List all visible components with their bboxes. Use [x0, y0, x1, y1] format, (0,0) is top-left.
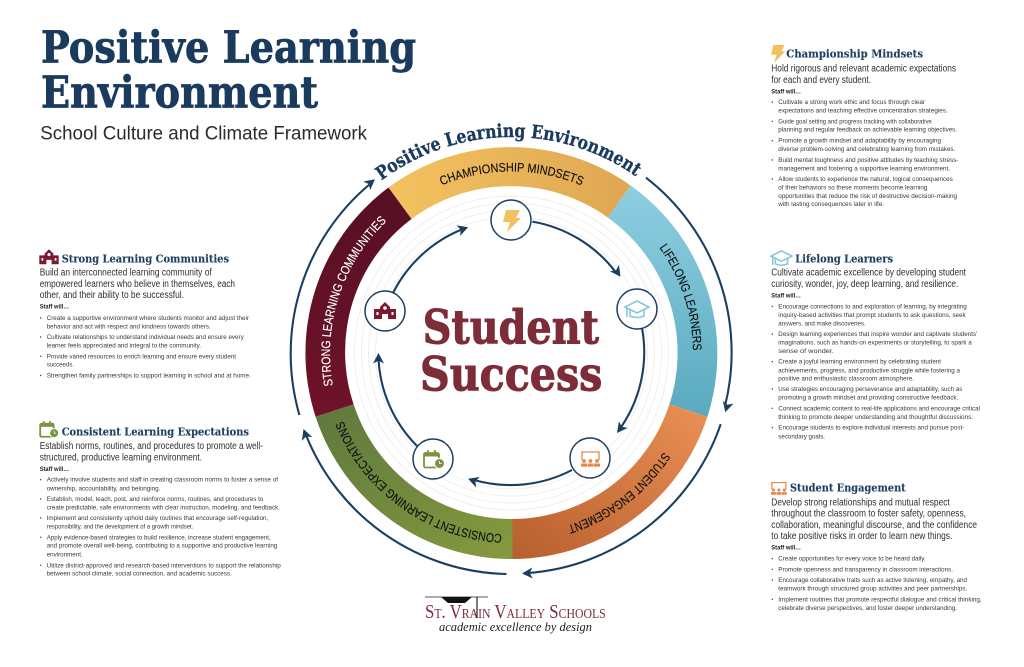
bullet list: Connect academic content to real-life applications and encourage critical — [778, 405, 981, 412]
bullet list: Encourage collaborative traits such as active listening, empathy, and — [778, 577, 967, 584]
bullet list: Apply evidence-based strategies to build resilience, increase student engagement, — [47, 534, 271, 541]
intro text — [771, 497, 977, 542]
icon: lightning bolt — [771, 45, 785, 63]
intro text — [771, 268, 966, 290]
bullet list: Cultivate a strong work ethic and focus through clear — [778, 99, 926, 106]
bullet list: Encourage students to explore individual interests and pursue post- — [778, 425, 964, 432]
center text: student success: Student — [423, 300, 599, 355]
panel: consistent learning expectations — [40, 421, 281, 578]
bullet list: with lasting consequences later in life. — [777, 201, 884, 208]
intro text: Hold rigorous and relevant academic expectations — [771, 64, 956, 75]
subtitle: School Culture and Climate Framework — [40, 122, 367, 144]
intro text: empowered learners who believe in themselves, each — [40, 279, 235, 290]
bullet list — [40, 477, 281, 578]
bullet list: management and fostering a supportive learning environment. — [778, 165, 950, 172]
title: Environment — [41, 67, 319, 118]
icon node: graduation cap — [617, 289, 657, 329]
bullet list: opportunities that reduce the risk of destructive decision-making — [778, 193, 957, 200]
staff will label: Staff will… — [771, 545, 801, 552]
bullet list: environment. — [47, 551, 83, 558]
center text: student success — [420, 300, 602, 403]
bullet list: Promote openness and transparency in classroom interactions. — [778, 566, 953, 573]
icon node: calendar — [413, 439, 453, 479]
bullet list: Create opportunities for every voice to be heard daily. — [778, 556, 926, 563]
intro text: throughout the classroom to foster safety, openness, — [771, 509, 966, 520]
icon: graduation cap — [771, 251, 792, 265]
staff will label: Staff will… — [771, 293, 801, 300]
bullet list: sense of wonder. — [778, 348, 834, 355]
bullet list: behavior and act with respect and kindness towards others. — [47, 324, 211, 330]
logo: st. vrain valley schools: St. Vrain Valley Schools — [425, 601, 606, 623]
bullet list: promoting a growth mindset and providing constructive feedback. — [778, 395, 958, 402]
bullet list: Provide varied resources to enrich learning and ensure every student — [47, 353, 236, 360]
panel: strong learning communities — [39, 249, 251, 380]
intro text: Develop strong relationships and mutual respect — [771, 497, 950, 508]
icon: school — [39, 249, 59, 264]
staff will label: Staff will… — [40, 466, 69, 473]
intro text: collaboration, meaningful discourse, and the confidence — [771, 520, 977, 531]
segment: strong learning communities: STRONG LEARNING COMMUNITIES — [321, 216, 386, 386]
bullet list: Establish, model, teach, post, and reinforce norms, routines, and procedures to — [47, 496, 264, 503]
title: Positive Learning — [41, 22, 416, 73]
heading: Lifelong Learners — [795, 251, 893, 265]
intro text: other, and their ability to be successful. — [40, 290, 184, 301]
intro text — [40, 268, 235, 301]
segment: consistent learning expectations: CONSISTENT LEARNING EXPECTATIONS — [336, 422, 502, 543]
intro text — [771, 64, 956, 86]
inner arrows — [373, 222, 644, 487]
icon: calendar — [40, 421, 59, 438]
bullet list: create predictable, safe environments with clear instruction, modeling, and feedback. — [47, 504, 280, 511]
bullet list: ownership, accountability, and belonging. — [47, 485, 160, 492]
segment: strong learning communities — [305, 188, 412, 417]
logo: st. vrain valley schools: academic excellence by design — [439, 620, 592, 634]
bullet list: responsibility, and the development of a growth mindset. — [47, 524, 193, 531]
bullet list: diverse problem-solving and celebrating learning from mistakes. — [778, 146, 955, 153]
bullet list: learner feels appreciated and integral to the community. — [47, 342, 201, 350]
title — [41, 22, 416, 118]
intro text: Establish norms, routines, and procedures to promote a well- — [40, 441, 263, 452]
bullet list: of their behaviors so these moments become learning — [778, 185, 928, 192]
intro text: curiosity, wonder, joy, deep learning, and resilience. — [771, 279, 958, 290]
panel: student engagement — [771, 481, 982, 612]
staff will label: Staff will… — [771, 88, 801, 95]
bullet list: positive and enthusiastic classroom atmosphere. — [778, 376, 914, 383]
circular framework diagram — [290, 123, 734, 578]
bullet list — [772, 99, 958, 208]
icon node: classroom — [570, 438, 610, 478]
bullet list: Create a joyful learning environment by celebrating student — [778, 359, 941, 366]
segment: championship mindsets: CHAMPIONSHIP MINDSETS — [440, 162, 584, 185]
bullet list: Create a supportive environment where students monitor and adjust their — [47, 315, 250, 322]
segment: student engagement: STUDENT ENGAGEMENT — [570, 453, 670, 534]
segment: lifelong learners: LIFELONG LEARNERS — [660, 243, 702, 350]
bullet list: imaginations, such as hands-on experiments or storytelling, to spark a — [778, 340, 972, 347]
bullet list: celebrate diverse perspectives, and foster deeper understanding. — [778, 605, 957, 612]
icon node: lightning bolt — [491, 200, 531, 240]
bullet list: succeeds. — [47, 362, 74, 369]
bullet list: Strengthen family partnerships to support learning in school and at home. — [47, 372, 251, 380]
intro text: Cultivate academic excellence by developing student — [771, 268, 966, 279]
icon node: school — [365, 291, 405, 331]
center text: student success: Success — [420, 348, 602, 403]
bullet list — [40, 315, 251, 380]
staff will label: Staff will… — [40, 304, 69, 311]
bullet list: Utilize district-approved and research-based interventions to support the relationship — [47, 562, 281, 569]
intro text: for each and every student. — [771, 75, 871, 86]
bullet list: Promote a growth mindset and adaptability by encouraging — [778, 138, 941, 145]
heading: Consistent Learning Expectations — [62, 425, 249, 439]
bullet list: Design learning experiences that inspire wonder and captivate students' — [778, 331, 977, 338]
bullet list: achievements, progress, and productive struggle while fostering a — [778, 367, 960, 374]
bullet list: thinking to promote deeper understanding and thoughtful discussions. — [778, 414, 973, 421]
intro text: structured, productive learning environment. — [40, 452, 202, 463]
bullet list: planning and regular feedback on achievable learning objectives. — [778, 127, 957, 134]
bullet list: Guide goal setting and progress tracking with collaborative — [778, 118, 932, 125]
bullet list — [772, 303, 981, 440]
bullet list: secondary goals. — [778, 433, 825, 440]
intro text: Build an interconnected learning community of — [40, 268, 212, 279]
bullet list: Use strategies encouraging perseverance and adaptability, such as — [778, 386, 963, 393]
logo: st. vrain valley schools — [425, 597, 606, 634]
bullet list: Allow students to experience the natural, logical consequences — [778, 176, 953, 183]
heading: Student Engagement — [790, 481, 906, 495]
bullet list: Encourage connections to and exploration of learning, by integrating — [778, 303, 967, 310]
bullet list: Implement routines that promote respectful dialogue and critical thinking, — [778, 596, 982, 603]
bullet list — [772, 556, 982, 612]
segment: championship mindsets — [388, 147, 630, 219]
bullet list: inquiry-based activities that prompt students to ask questions, seek — [778, 312, 966, 319]
panel: championship mindsets — [771, 45, 958, 208]
bullet list: Cultivate relationships to understand individual needs and ensure every — [47, 334, 244, 341]
bullet list: Build mental toughness and positive attitudes by teaching stress- — [778, 157, 958, 164]
bullet list: expectations and teaching effective concentration strategies. — [778, 107, 948, 114]
bullet list: Implement and consistently uphold daily routines that encourage self-regulation, — [47, 515, 268, 522]
icon: classroom — [771, 483, 787, 495]
bullet list: answers, and make discoveries. — [778, 321, 866, 328]
intro text: to take positive risks in order to learn new things. — [771, 531, 952, 542]
intro text — [40, 441, 263, 463]
panel: lifelong learners — [771, 251, 981, 440]
segment: lifelong learners — [608, 186, 718, 417]
bullet list: teamwork through structured group activities and peer partnerships. — [778, 586, 967, 593]
bullet list: between school climate, social connection, and academic success. — [47, 571, 232, 578]
bullet list: Actively involve students and staff in creating classroom norms to foster a sense of — [47, 477, 278, 484]
heading: Strong Learning Communities — [62, 252, 229, 266]
bullet list: and promote overall well-being, contributing to a supportive and productive learning — [47, 543, 278, 550]
outer arrows — [291, 175, 733, 579]
heading: Championship Mindsets — [786, 47, 923, 61]
curved heading: Positive Learning Environment — [374, 123, 641, 180]
segment: student engagement — [512, 404, 708, 559]
